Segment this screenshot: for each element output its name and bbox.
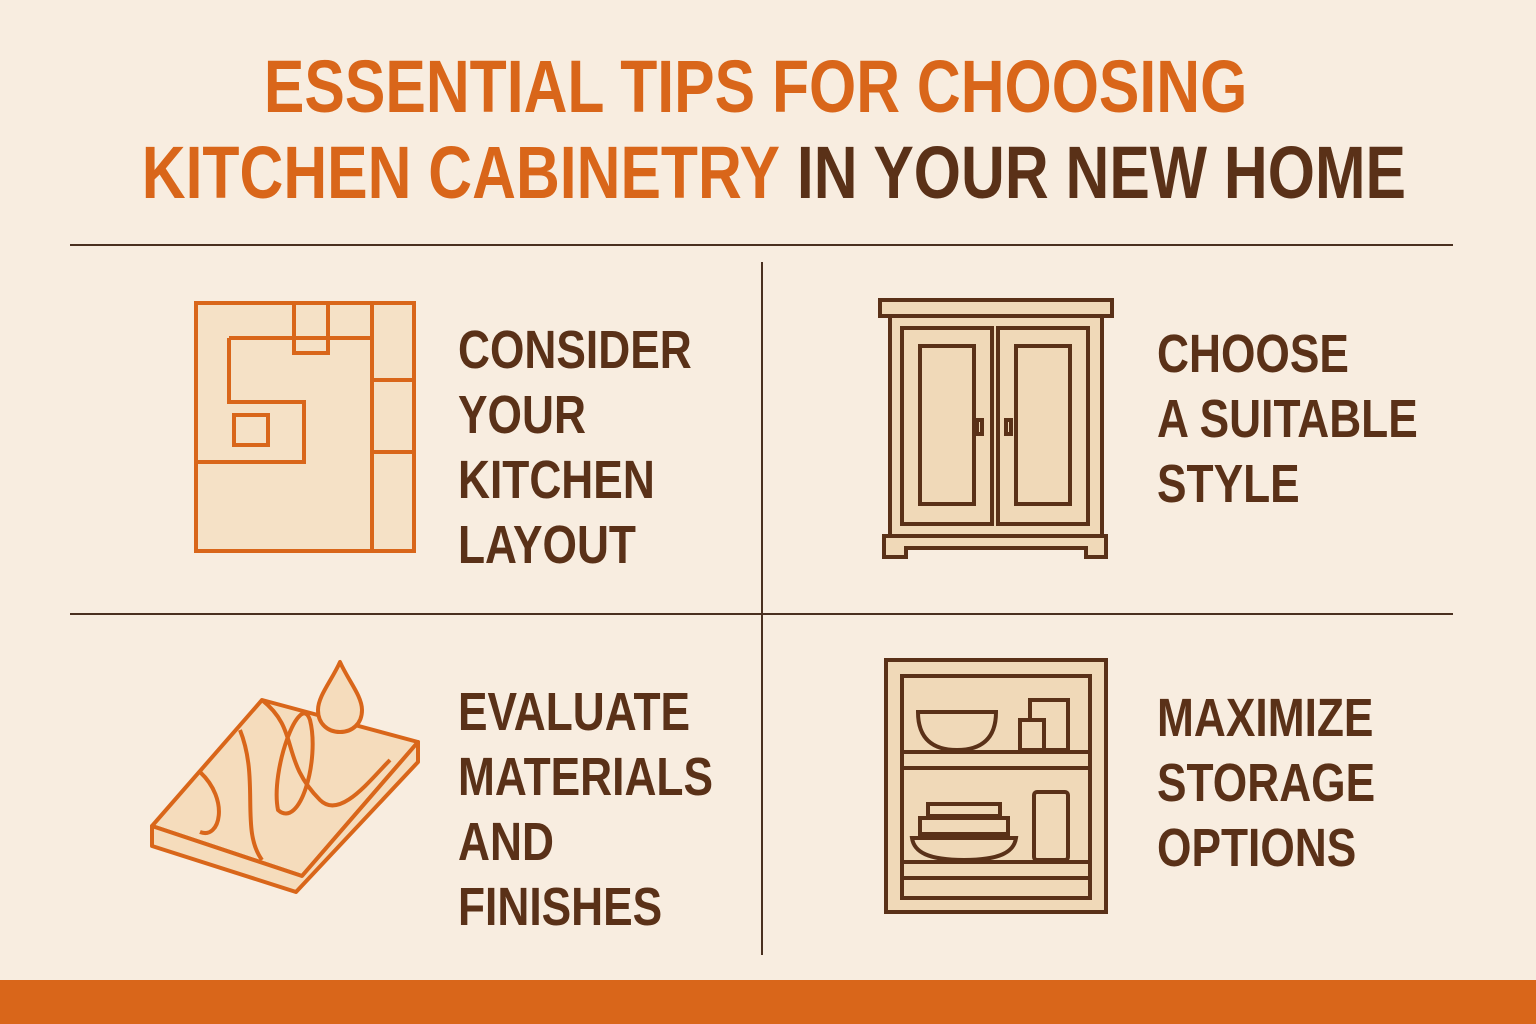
text: layout: CONSIDER [458, 320, 692, 380]
text: materials: EVALUATE [458, 682, 690, 742]
text: style: A SUITABLE [1157, 389, 1418, 449]
text: layout: KITCHEN [458, 450, 655, 510]
text: style: STYLE [1157, 454, 1300, 514]
text: storage: OPTIONS [1157, 818, 1356, 878]
text: ESSENTIAL TIPS FOR CHOOSING [264, 45, 1248, 128]
text: storage [1157, 688, 1375, 878]
text: materials [458, 682, 713, 937]
text: storage: STORAGE [1157, 753, 1375, 813]
text: layout [458, 320, 692, 575]
text: layout: YOUR [458, 385, 586, 445]
text: style: CHOOSE [1157, 324, 1349, 384]
text: storage: MAXIMIZE [1157, 688, 1373, 748]
footer bar [0, 980, 1536, 1024]
text: materials: MATERIALS [458, 747, 713, 807]
text: KITCHEN CABINETRY IN YOUR NEW HOME [142, 131, 1406, 214]
text: layout: LAYOUT [458, 515, 636, 575]
title [142, 45, 1406, 214]
text: materials: AND [458, 812, 554, 872]
text: materials: FINISHES [458, 877, 662, 937]
text: style [1157, 324, 1418, 514]
